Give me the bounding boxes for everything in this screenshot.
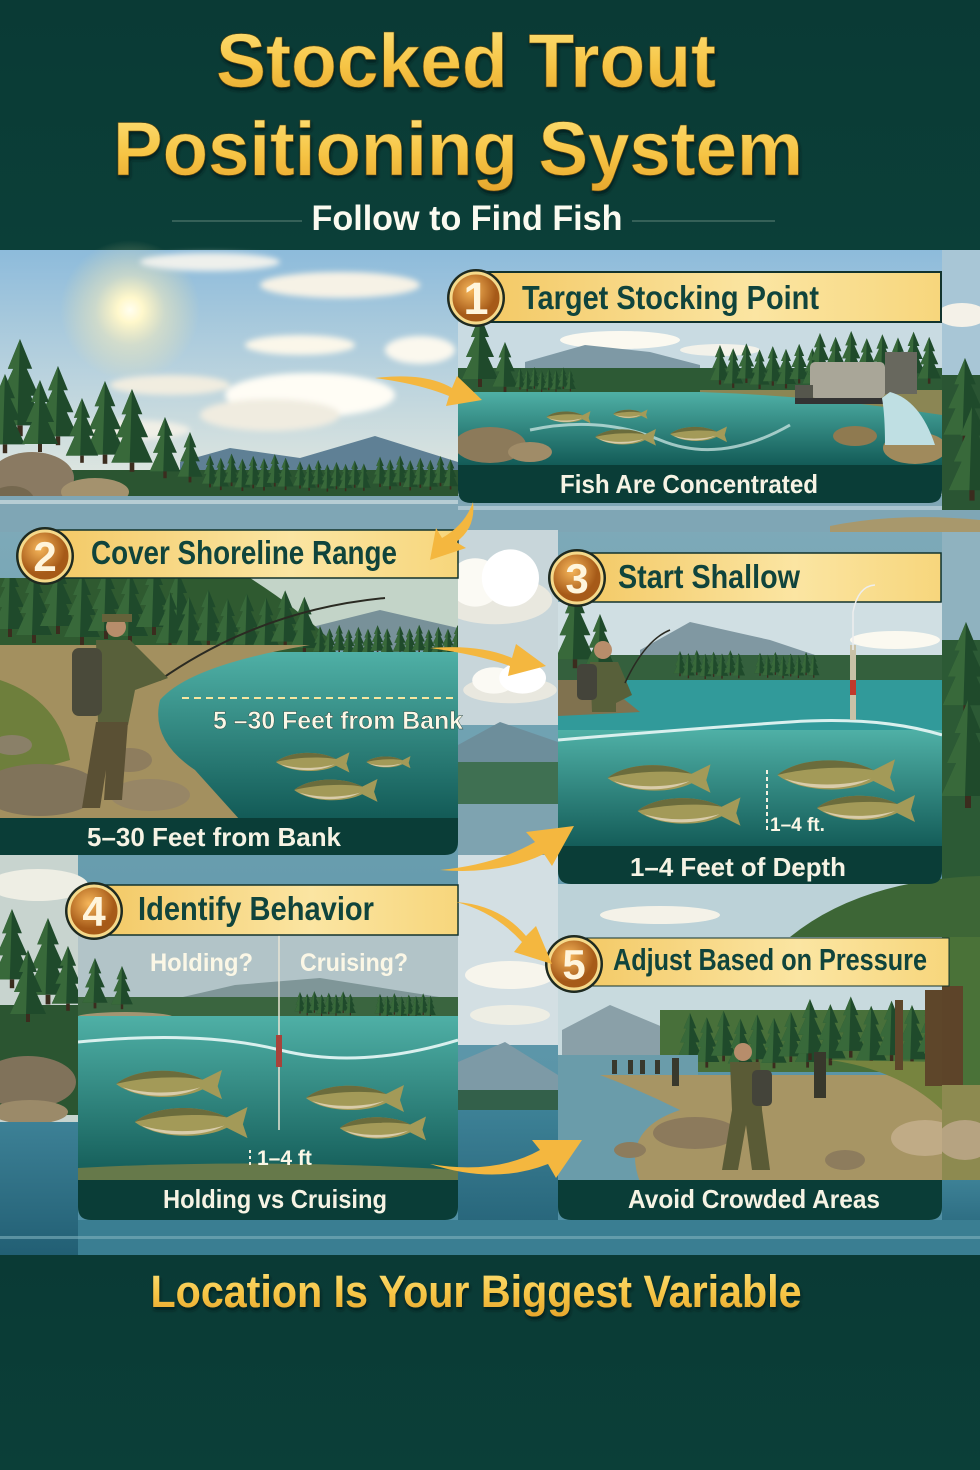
caption: 5–30 Feet from Bank [87, 822, 342, 852]
arrow: step 4 to step 5 [456, 902, 552, 964]
caption bar [558, 846, 942, 884]
badge 3: 3 [565, 555, 589, 602]
gap between panel 2 and 3 [458, 530, 558, 725]
panel 4: identify behavior: Holding? [150, 949, 253, 977]
badge 4 [65, 882, 123, 940]
panel 4: identify behavior: 1–4 ft [257, 1147, 312, 1170]
caption: Avoid Crowded Areas [628, 1184, 880, 1214]
panel 4: identify behavior [65, 882, 458, 1220]
title [113, 19, 803, 192]
arrow: step 4 to step 5 lower [430, 1140, 582, 1178]
lower left [0, 855, 78, 1125]
panel 2: cover shoreline range [0, 527, 474, 855]
badge 5: 5 [562, 941, 586, 988]
panel 4: identify behavior: Cruising? [300, 949, 408, 977]
upper right of panel 5 [558, 884, 980, 940]
arrow: step 2 to step 3 [430, 644, 546, 676]
heading bar [572, 938, 949, 986]
heading bar [40, 530, 458, 578]
caption: Holding vs Cruising [163, 1184, 387, 1214]
title: Stocked Trout [216, 19, 716, 104]
heading bar [92, 885, 458, 935]
caption: Fish Are Concentrated [560, 469, 818, 499]
step heading: Target Stocking Point [522, 279, 819, 316]
badge 2 [16, 527, 74, 585]
footer tagline: Location Is Your Biggest Variable [150, 1266, 802, 1317]
arrow: scene to step 1 [375, 376, 482, 406]
step heading: Cover Shoreline Range [91, 534, 397, 571]
heading bar [476, 272, 941, 322]
gap between panel 4 and 5 [458, 855, 558, 1045]
footer band [0, 1255, 980, 1470]
badge 4: 4 [82, 888, 106, 935]
title: Positioning System [113, 107, 803, 192]
bobber line [853, 585, 875, 650]
caption bar [458, 465, 942, 503]
badge 1 [447, 269, 505, 327]
badge 5 [545, 935, 603, 993]
arrow: step 1 to step 2 [430, 502, 473, 560]
caption bar [0, 818, 458, 855]
panel 1: target stocking point [447, 269, 947, 503]
caption bar [558, 1180, 942, 1220]
background scene [0, 240, 980, 1255]
step heading: Start Shallow [618, 558, 800, 595]
panel 3: start shallow [548, 549, 942, 884]
heading bar [575, 553, 941, 602]
subtitle: Follow to Find Fish [312, 199, 622, 238]
arrow: step 2 to step 3 lower [440, 826, 574, 871]
caption bar [78, 1180, 458, 1220]
caption: 1–4 Feet of Depth [630, 852, 846, 882]
strip right of panel 3 [942, 532, 980, 642]
panel 3: start shallow: 1–4 ft. [770, 815, 825, 836]
panel 5: adjust based on pressure [545, 935, 968, 1220]
step heading: Identify Behavior [138, 890, 374, 927]
badge 1: 1 [463, 273, 489, 324]
distance label: 5 –30 Feet from Bank [213, 707, 463, 735]
header band [0, 0, 980, 250]
badge 2: 2 [33, 533, 57, 580]
badge 3 [548, 549, 606, 607]
